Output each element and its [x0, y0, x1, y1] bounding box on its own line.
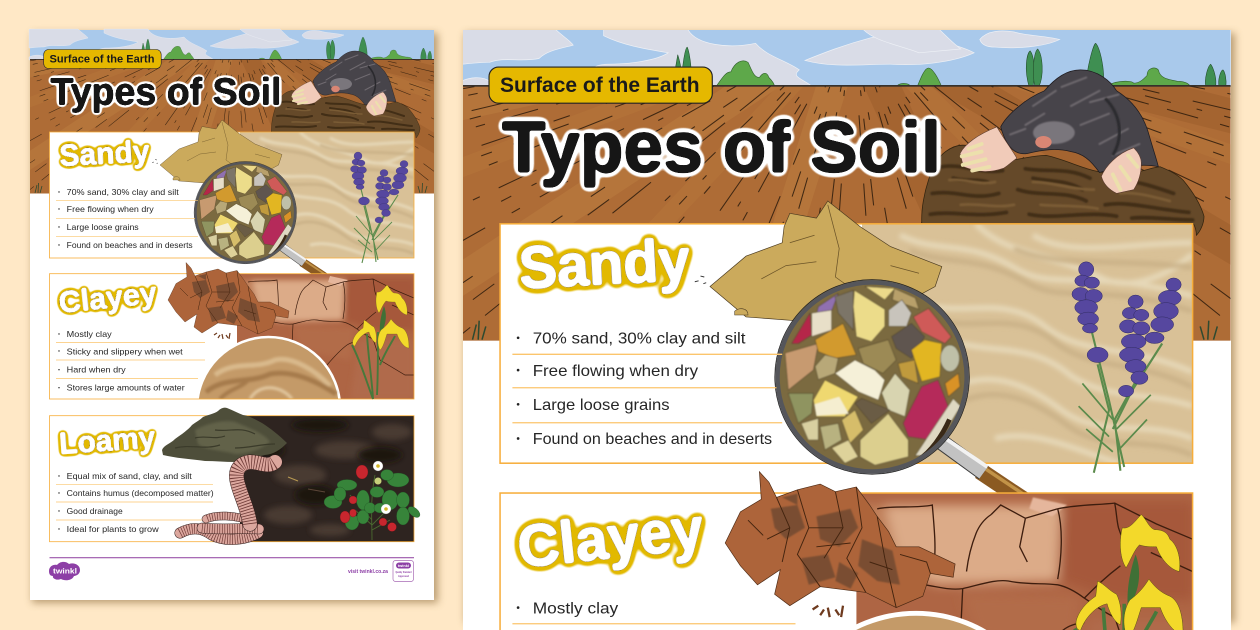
panel: loamy — [50, 408, 422, 542]
footer: branding: Quality Standard — [396, 570, 412, 574]
panel: sandy — [50, 120, 414, 282]
badge: topic: Surface of the Earth — [50, 54, 155, 66]
panel: loamy: Equal mix of sand, clay, and silt — [67, 471, 192, 481]
badge: topic — [44, 50, 161, 68]
panel: loamy: Loamy — [58, 419, 157, 461]
title, large: Types of Soil — [502, 108, 941, 188]
panel: clayey, large: Clayey — [515, 496, 707, 581]
panel: clayey: Hard when dry — [67, 365, 127, 375]
panel: sandy, large: Free flowing when dry — [533, 363, 698, 380]
panel: sandy: Large loose grains — [67, 222, 139, 232]
panel: sandy, large: Sandy — [517, 228, 692, 301]
illustration: mole on mound — [271, 51, 420, 138]
panel: clayey: Mostly clay — [67, 329, 113, 339]
panel: sandy, large — [500, 201, 1193, 509]
panel: sandy, large: Large loose grains — [533, 397, 670, 414]
badge: topic, large — [489, 67, 712, 103]
panel: loamy: Ideal for plants to grow — [67, 524, 160, 534]
panel: clayey, large: Mostly clay — [533, 600, 618, 617]
panel: clayey: Stores large amounts of water — [67, 383, 185, 393]
title: Types of Soil — [50, 72, 282, 114]
panel: loamy: Contains humus (decomposed matter) — [67, 488, 214, 498]
panel: sandy: Sandy — [59, 133, 151, 173]
panel: clayey — [50, 262, 414, 480]
panel: loamy: Good drainage — [67, 506, 123, 516]
footer: branding: twinkl — [398, 564, 409, 568]
illustration: sky and ploughed field — [0, 25, 1260, 200]
illustration: sky and ploughed field, large — [0, 21, 1260, 353]
panel: sandy: 70% sand, 30% clay and silt — [67, 187, 179, 197]
footer: branding — [49, 557, 414, 582]
panel: clayey: Sticky and slippery when wet — [67, 346, 183, 356]
panel: sandy, large: Found on beaches and in deserts — [533, 431, 772, 448]
footer: branding: twinkl — [53, 568, 77, 576]
footer: branding: Approved — [398, 574, 409, 578]
footer: branding: visit twinkl.co.za — [348, 569, 388, 575]
panel: sandy, large: 70% sand, 30% clay and silt — [533, 330, 746, 347]
panel: clayey, large — [500, 472, 1193, 630]
panel: clayey: Clayey — [57, 275, 159, 320]
badge: topic, large: Surface of the Earth — [500, 74, 700, 97]
panel: sandy: Found on beaches and in deserts — [67, 240, 193, 250]
panel: sandy: Free flowing when dry — [67, 204, 155, 214]
illustration: mole on mound, large — [922, 70, 1204, 235]
